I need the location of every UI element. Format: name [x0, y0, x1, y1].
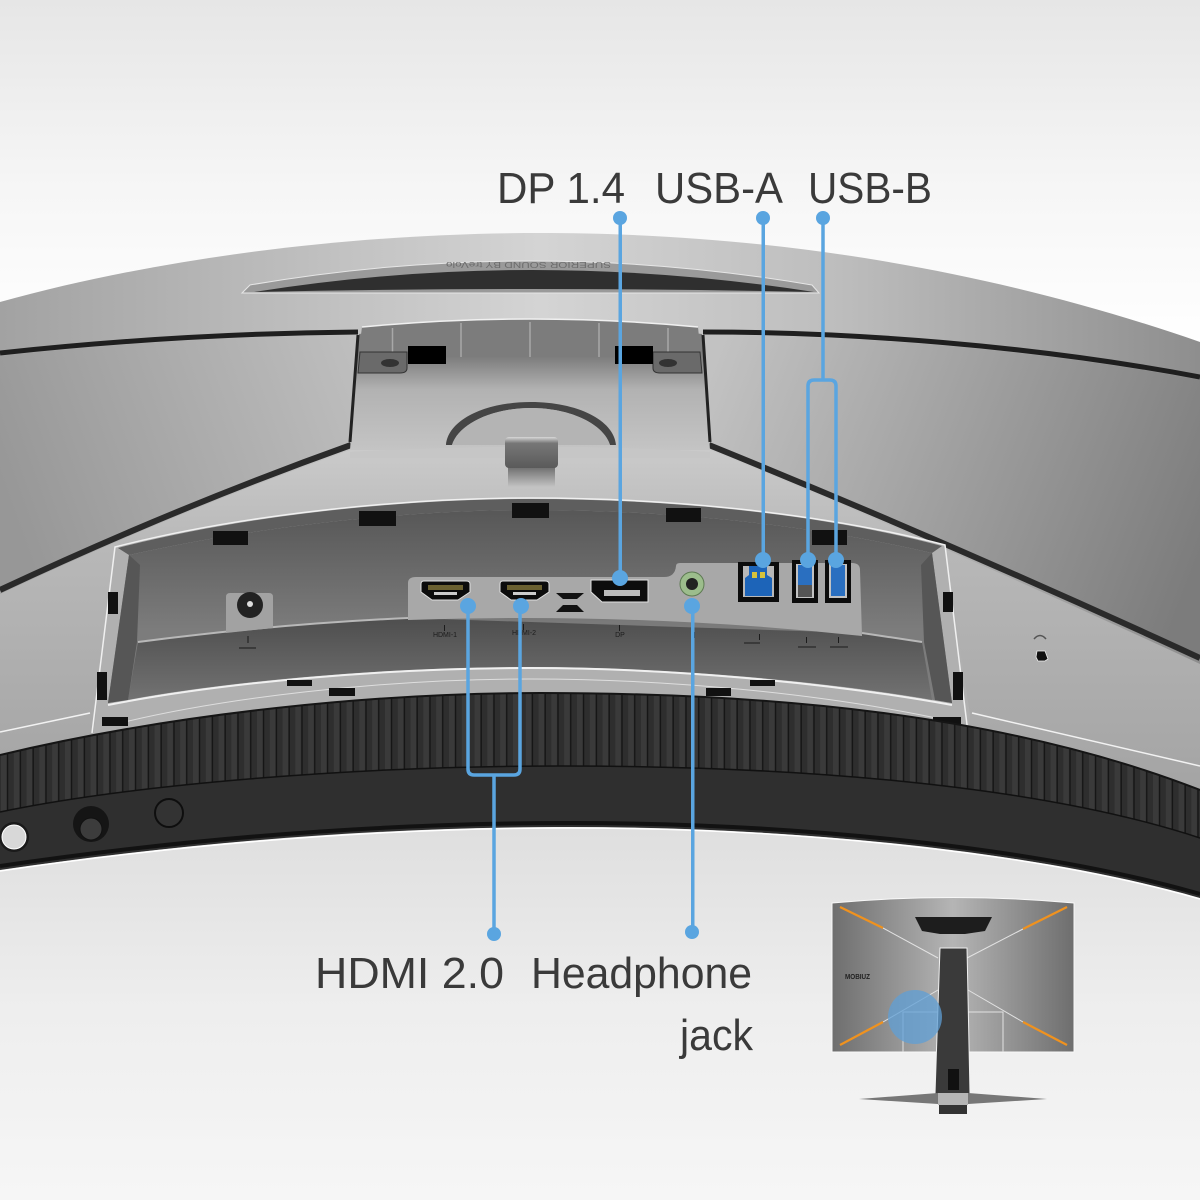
I/O port plate [408, 563, 862, 636]
bay clips [97, 503, 963, 731]
bay outline [92, 498, 968, 733]
port: HDMI 1 [421, 581, 470, 600]
background: lower [0, 820, 1200, 1200]
monitor upper housing [0, 233, 1200, 800]
label: Headphone jack: jack [678, 1011, 754, 1060]
inset stand cable hole [948, 1069, 959, 1090]
inset stand neck [935, 948, 970, 1094]
bezel lower highlight [0, 828, 1200, 899]
port labels: HDMI-1 [433, 632, 457, 639]
vent strip: lower right [709, 445, 1200, 658]
inset screen back [832, 898, 1074, 1052]
port: DisplayPort [591, 580, 648, 602]
monitor rear close-up [0, 233, 1200, 899]
label: Headphone jack: Headphone [531, 949, 752, 998]
port: USB-B [738, 562, 779, 602]
port: HDMI 2 [500, 581, 549, 600]
inset grille [915, 917, 992, 934]
right rear panel [703, 335, 1200, 655]
round stand hub [446, 402, 616, 445]
label: HDMI 2.0: HDMI 2.0 [315, 949, 504, 998]
power socket plate [226, 592, 273, 648]
port bay frame [92, 498, 970, 745]
port: USB-A lower [825, 560, 851, 603]
port clips between HDMI and DP [556, 593, 584, 612]
panel seam: upper left [0, 332, 358, 353]
screw: left [381, 359, 399, 367]
label: Headphone jack [531, 949, 754, 1060]
lock slot [1034, 636, 1048, 661]
hub face [452, 408, 610, 445]
bezel groove [0, 823, 1200, 894]
inset highlight circle [888, 990, 942, 1044]
rib lower line [0, 766, 1200, 838]
control: white button [0, 822, 29, 852]
inset stand base [859, 1093, 1047, 1114]
mount tab: right [653, 352, 702, 373]
inset: full monitor rear view [832, 898, 1074, 1114]
lower seam: left [0, 713, 90, 732]
bezel top line [0, 693, 1200, 790]
callout connector: USB-A [755, 211, 771, 568]
mount tab: left [358, 352, 407, 373]
stand latch [505, 437, 558, 468]
bay side walls [108, 553, 952, 703]
port bay back wall [108, 510, 952, 703]
port: headphone jack [680, 572, 704, 596]
stand mount recess [350, 319, 710, 487]
port labels: HDMI-2 [512, 630, 536, 637]
control: joystick [73, 806, 109, 842]
bay lip highlight [108, 668, 952, 705]
callout connector: headphone jack [684, 598, 700, 939]
wall pins [392, 322, 668, 357]
port labels: DP [615, 632, 625, 639]
wall highlight [362, 319, 698, 327]
speaker grille [242, 260, 819, 293]
label: DP 1.4: DP 1.4 [497, 164, 625, 213]
bay top band [118, 499, 942, 555]
hub lower edge [350, 447, 710, 458]
inset logo: MOBIUZ [845, 974, 871, 981]
callout connector: DP 1.4 [612, 211, 628, 586]
label: USB-A: USB-A [655, 164, 784, 213]
mount slot: right [615, 346, 653, 364]
panel seam: upper right [703, 332, 1200, 377]
vent strip: lower left [0, 445, 351, 590]
recess side walls [350, 335, 710, 442]
port bay floor [128, 618, 932, 700]
callout connector: USB-B bracket [800, 211, 844, 568]
inset orange lights [840, 907, 1067, 1045]
port: USB-A upper [792, 560, 818, 603]
bay lip second line [112, 679, 955, 725]
recess upper wall [358, 319, 701, 357]
speaker branding: SUPERIOR SOUND BY treVolo [445, 260, 611, 269]
front bezel band [0, 693, 1200, 898]
background: upper [0, 0, 1200, 345]
callout connector: HDMI bracket [460, 598, 529, 941]
left rear panel [0, 335, 358, 587]
lower housing [0, 446, 1200, 800]
control: round button [155, 799, 183, 827]
lower seam: right [972, 713, 1200, 766]
latch shadow [508, 467, 555, 487]
bay ledge line [138, 618, 922, 642]
inset seams [883, 928, 1023, 1052]
ribbed vent band [0, 693, 1200, 838]
port labels [433, 624, 848, 647]
power label [239, 636, 256, 648]
screw: right [659, 359, 677, 367]
mount slot: left [408, 346, 446, 364]
label: USB-B: USB-B [808, 164, 932, 213]
